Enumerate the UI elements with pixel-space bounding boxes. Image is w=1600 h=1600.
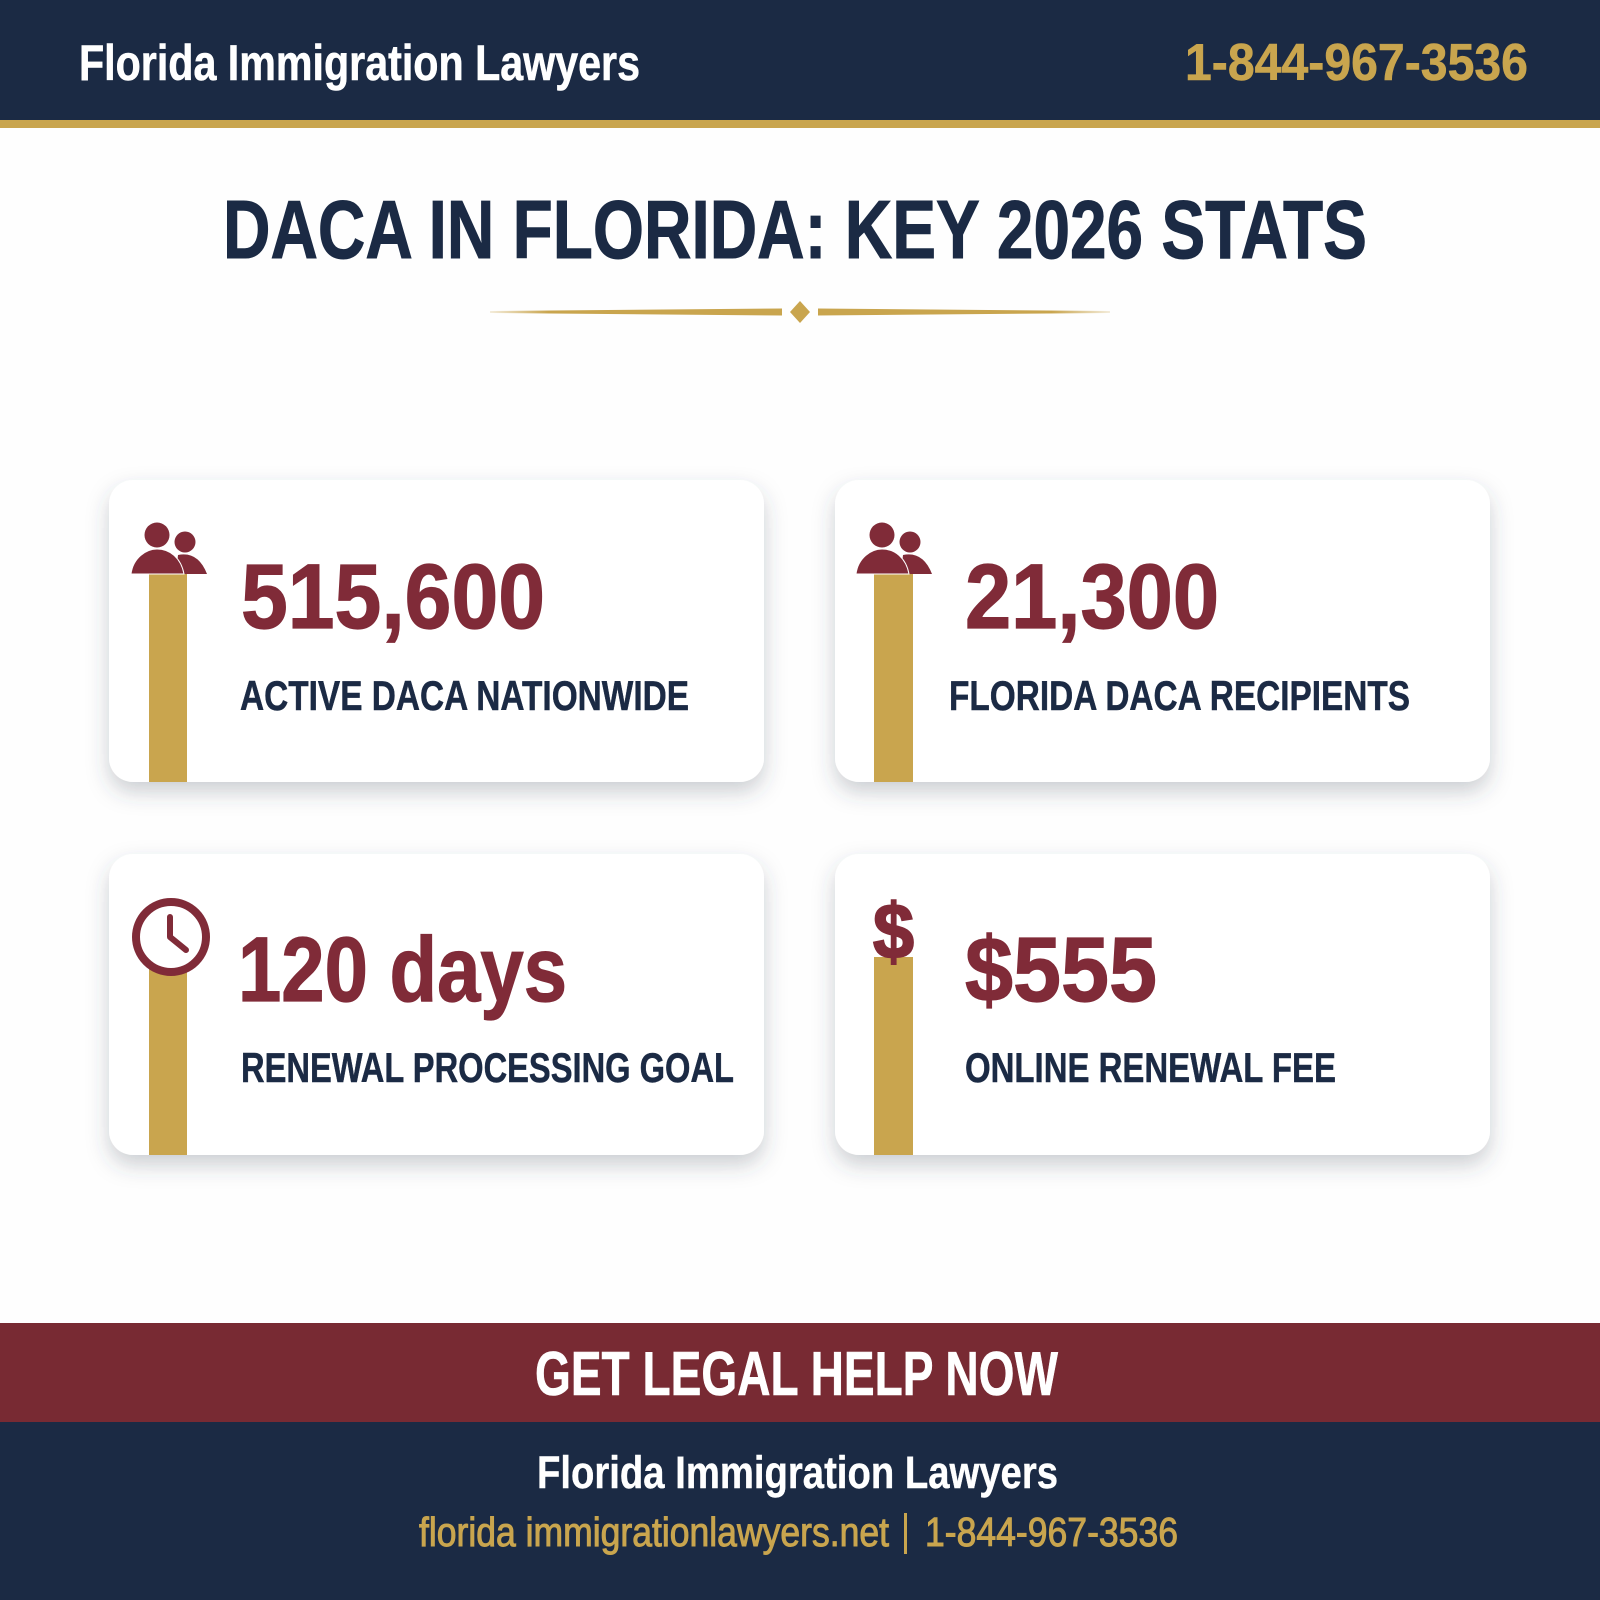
stat value: 120 days bbox=[238, 919, 567, 1021]
icon: clock bbox=[136, 902, 206, 972]
icon: dollar sign: $ bbox=[873, 887, 914, 975]
header bar bbox=[0, 0, 1600, 128]
header firm name: Florida Immigration Lawyers bbox=[79, 35, 640, 91]
stat value: $555 bbox=[965, 919, 1157, 1021]
gold bar bbox=[874, 574, 913, 782]
gold bar bbox=[149, 574, 187, 782]
stat value: 21,300 bbox=[965, 546, 1219, 648]
stat label: FLORIDA DACA RECIPIENTS bbox=[949, 672, 1410, 719]
gold bar bbox=[874, 957, 913, 1155]
footer contact line: florida immigrationlawyers.net bbox=[419, 1509, 890, 1555]
icon: people bbox=[131, 522, 207, 574]
header phone number: 1-844-967-3536 bbox=[1185, 34, 1528, 92]
footer bbox=[0, 1422, 1600, 1600]
footer contact line: 1-844-967-3536 bbox=[925, 1509, 1178, 1555]
panel: Florida DACA recipients bbox=[835, 480, 1490, 782]
stat value: 515,600 bbox=[241, 546, 545, 648]
stat label: RENEWAL PROCESSING GOAL bbox=[241, 1044, 734, 1091]
call to action band bbox=[0, 1323, 1600, 1422]
stat label: ONLINE RENEWAL FEE bbox=[965, 1044, 1336, 1091]
panel: renewal processing goal bbox=[109, 854, 764, 1155]
panel: online renewal fee bbox=[835, 854, 1490, 1155]
footer firm name: Florida Immigration Lawyers bbox=[537, 1447, 1058, 1498]
icon: people bbox=[856, 522, 932, 574]
gold bar bbox=[149, 965, 187, 1155]
stat label: ACTIVE DACA NATIONWIDE bbox=[240, 672, 689, 719]
call to action text: GET LEGAL HELP NOW bbox=[535, 1340, 1058, 1409]
title divider bbox=[490, 301, 1110, 323]
panel: active DACA nationwide bbox=[109, 480, 764, 782]
